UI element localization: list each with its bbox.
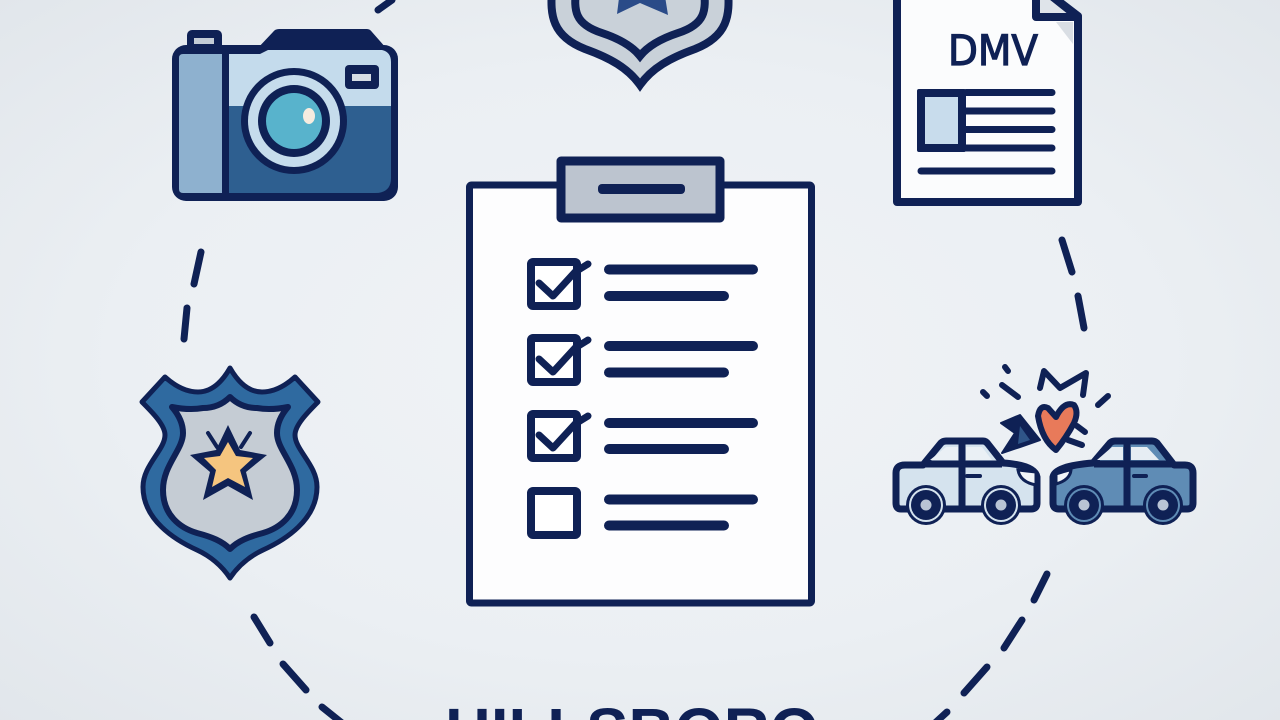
impact burst xyxy=(983,367,1108,453)
checklist row 1 xyxy=(531,262,753,306)
icon: car collision xyxy=(896,367,1193,525)
clipboard checklist xyxy=(470,161,812,603)
dashed circle connecting the icons xyxy=(184,0,1084,720)
right car xyxy=(1053,441,1193,525)
icon: DMV document xyxy=(897,0,1078,202)
licence form block xyxy=(917,89,1052,171)
checklist row 4 xyxy=(531,491,753,535)
checklist row 2 xyxy=(531,338,753,382)
clipboard clip xyxy=(561,161,720,218)
left car xyxy=(896,441,1037,525)
DMV label: DMV xyxy=(948,26,1038,75)
badge star xyxy=(190,425,267,500)
checklist row 3 xyxy=(531,414,753,458)
icon: camera xyxy=(172,29,398,201)
icon: top shield badge xyxy=(551,0,729,85)
icon: police badge xyxy=(142,368,318,578)
